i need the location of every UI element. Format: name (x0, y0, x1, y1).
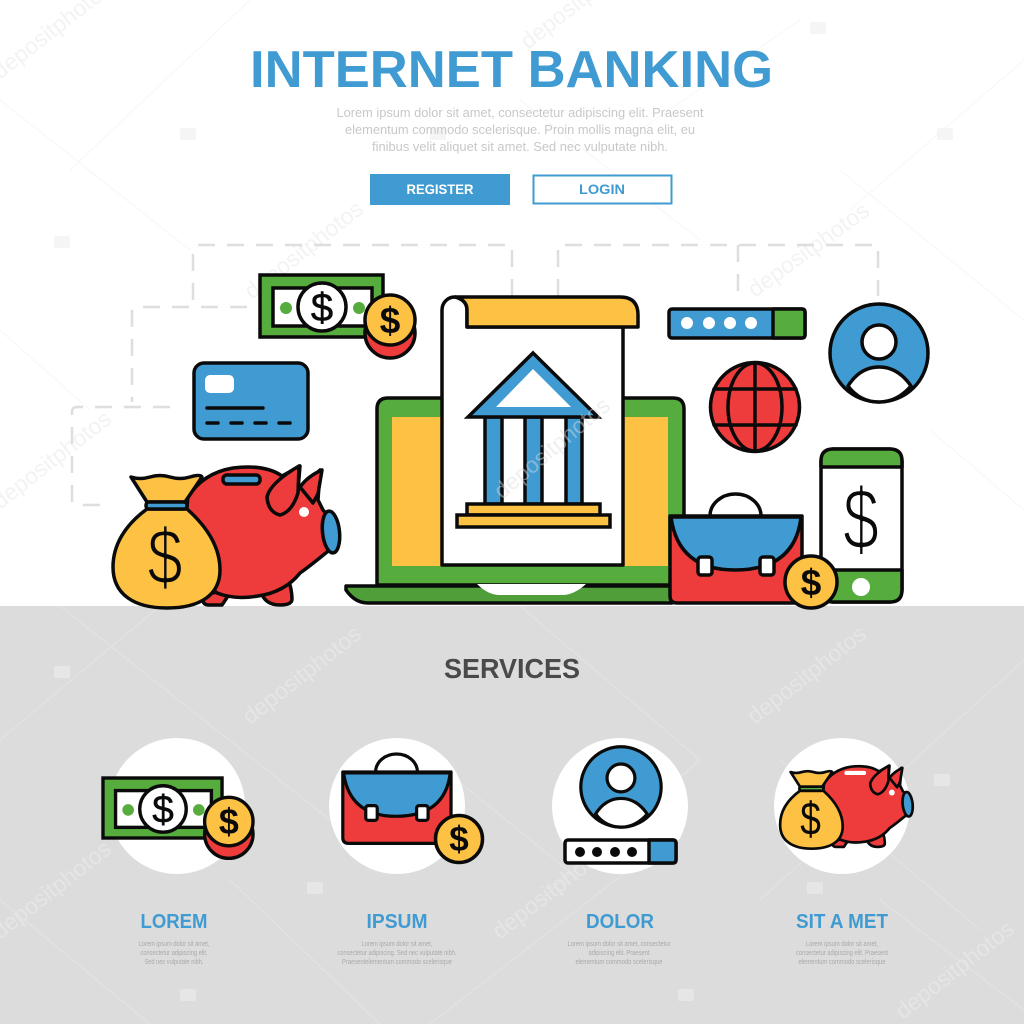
bank steps (457, 504, 610, 527)
icon: credit card (194, 363, 308, 439)
icon: briefcase (343, 754, 451, 843)
watermark pattern: depositphotos (890, 915, 1019, 1024)
icon: user avatar (581, 747, 661, 827)
description: ipsum (338, 941, 457, 966)
icon: smartphone: $ (843, 471, 879, 568)
heading: services: SERVICES (444, 653, 580, 684)
icon: banknote with coins (260, 275, 415, 358)
icon: banknote with coins: $ (219, 802, 239, 842)
icon: piggy bank with money bag: $ (800, 793, 821, 845)
icon: piggy bank with money bag (113, 466, 342, 608)
description: dolor: elementum commodo scelerisque (576, 959, 663, 966)
description: lorem: consectetur adipiscing elit. (140, 950, 208, 957)
service: lorem (103, 738, 253, 966)
description: sit a met: elementum commodo scelerisque (798, 959, 886, 966)
icon: smartphone (821, 449, 902, 602)
icon: coin (436, 816, 482, 862)
intro text: finibus velit aliquet sit amet. Sed nec vulputate nibh. (372, 140, 668, 154)
bank roof (468, 353, 598, 417)
login button (534, 176, 672, 204)
watermark pattern: depositphotos (237, 620, 366, 729)
register button: REGISTER (406, 181, 474, 197)
label: sit a met: SIT A MET (796, 911, 888, 933)
icon: globe (710, 362, 800, 452)
description: dolor: adipiscing elit. Praesent (588, 950, 650, 957)
icon: coin: $ (449, 820, 469, 859)
icon: coin (785, 556, 837, 608)
icon: password field (669, 309, 805, 338)
icon: banknote with coins: $ (152, 789, 174, 832)
label: lorem: LOREM (140, 911, 208, 933)
intro text: Lorem ipsum dolor sit amet, consectetur adipiscing elit. Praesent (336, 106, 704, 120)
title: INTERNET BANKING (250, 41, 773, 99)
icon: laptop (346, 398, 684, 603)
icon: user avatar (830, 304, 928, 402)
description: ipsum: consectetur adipiscing. Sed nec vulputate nibh. (338, 950, 457, 957)
watermark pattern: depositphotos (743, 197, 874, 302)
label: ipsum: IPSUM (366, 911, 428, 933)
intro text (336, 106, 704, 154)
description: sit a met: Lorem ipsum dolor sit amet, (806, 941, 878, 948)
icon: document with bank building (442, 297, 638, 565)
icon: piggy bank with money bag: $ (147, 513, 183, 602)
description: sit a met: consectetur adipiscing elit. Praesent (796, 950, 888, 957)
watermark pattern: depositphotos (487, 835, 616, 944)
description: lorem (138, 941, 210, 966)
bank columns (485, 417, 582, 504)
icon: banknote with coins: $ (380, 300, 401, 341)
watermark pattern: depositphotos (239, 195, 368, 304)
description: dolor (568, 941, 671, 966)
service: dolor (552, 738, 688, 966)
dashed connectors (72, 245, 878, 505)
icon: coin: $ (801, 562, 822, 603)
description: ipsum: Lorem ipsum dolor sit amet, (362, 941, 433, 948)
description: lorem: Sed nec vulputate nibh. (144, 959, 204, 966)
description: ipsum: Praesentelementum commodo scelerisque (342, 959, 452, 966)
intro text: elementum commodo scelerisque. Proin mollis magna elit, eu (345, 123, 695, 137)
login button: LOGIN (579, 181, 625, 197)
icon: password field (565, 840, 676, 863)
panel: services background (0, 606, 1024, 1024)
icon: banknote with coins (103, 778, 253, 858)
icon: piggy bank with money bag (780, 766, 914, 849)
register button (370, 174, 510, 205)
watermark over document: depositphotos (489, 392, 615, 504)
watermark pattern: depositphotos (742, 620, 871, 729)
label: dolor: DOLOR (586, 911, 655, 933)
service: ipsum (329, 738, 482, 966)
description: dolor: Lorem ipsum dolor sit amet, consectetur (568, 941, 671, 948)
description: lorem: Lorem ipsum dolor sit amet, (138, 941, 210, 948)
description: sit a met (796, 941, 888, 966)
icon: briefcase (670, 494, 802, 603)
icon: banknote with coins: $ (311, 286, 333, 330)
service: sit a met (774, 738, 914, 966)
